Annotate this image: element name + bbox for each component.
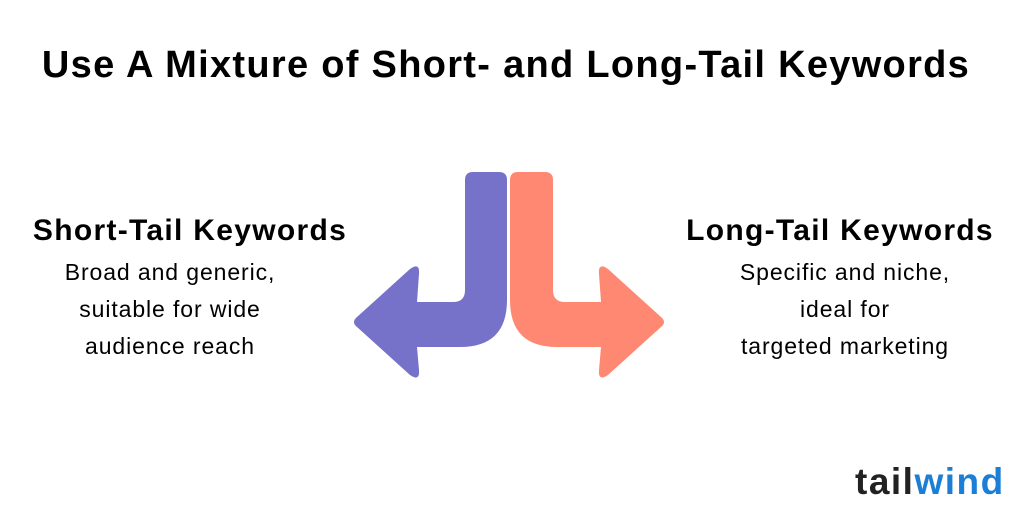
text: long-tail description: Specific and niche, xyxy=(740,259,950,285)
text: long-tail description: targeted marketing xyxy=(741,333,949,359)
panel: short-tail xyxy=(33,214,347,359)
text: long-tail description xyxy=(740,259,950,359)
arrow: orange right xyxy=(510,172,664,378)
title: Use A Mixture of Short- and Long-Tail Keywords xyxy=(42,44,970,86)
logo: tailwind: tailwind xyxy=(855,461,1005,502)
text: short-tail description: Broad and generic, xyxy=(65,259,275,285)
panel: long-tail xyxy=(686,214,994,359)
text: short-tail description: suitable for wide xyxy=(79,296,261,322)
heading: short-tail: Short-Tail Keywords xyxy=(33,214,347,247)
text: long-tail description: ideal for xyxy=(800,296,890,322)
text: short-tail description: audience reach xyxy=(85,333,255,359)
text: short-tail description xyxy=(65,259,275,359)
arrow: purple left xyxy=(354,172,507,378)
heading: long-tail: Long-Tail Keywords xyxy=(686,214,994,247)
